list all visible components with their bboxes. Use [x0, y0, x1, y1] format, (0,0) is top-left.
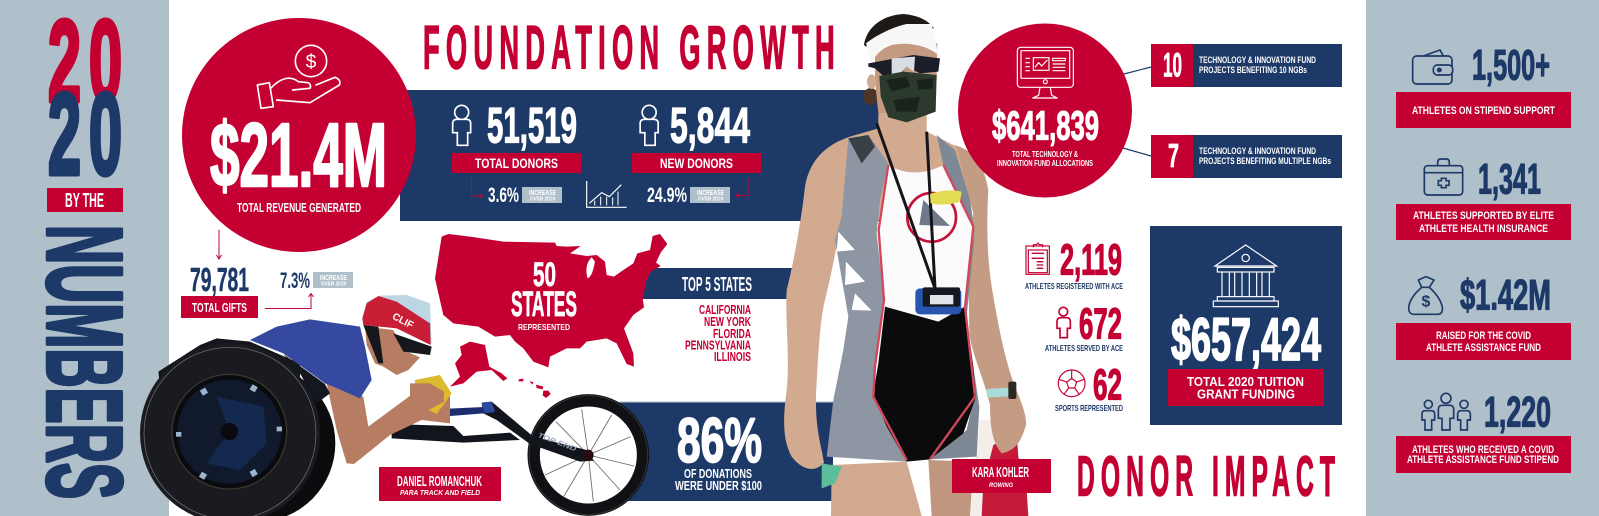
stat box: 7 projects: TECHNOLOGY & INNOVATION FUND	[1199, 146, 1316, 157]
stat: athletes registered with ace: 2,119	[1060, 236, 1122, 284]
arrow: new donors increase	[736, 178, 748, 198]
icon: person	[1057, 307, 1070, 338]
icon: monitor	[1017, 47, 1073, 98]
icon: hand holding coin	[257, 45, 340, 108]
stat: athletes served by ace: 672	[1079, 300, 1122, 348]
icon: three people	[1422, 393, 1470, 430]
infographic canvas: FOUNDATION GROWTH	[423, 14, 841, 82]
panel: total revenue circle	[182, 18, 416, 252]
arrow: donors increase	[472, 178, 482, 198]
icon: wallet	[1413, 50, 1453, 84]
stat: health insurance: 1,341	[1478, 156, 1541, 204]
stat: health insurance	[1396, 156, 1571, 240]
stat: total donors: TOTAL DONORS	[475, 155, 558, 171]
icon: building	[1213, 245, 1278, 307]
big number: technology fund: $641,839	[992, 102, 1099, 148]
stat: gifts increase: OVER 2019	[321, 282, 346, 288]
stat: covid fund raised: RAISED FOR THE COVID	[1436, 330, 1531, 342]
big number: tuition: $657,424	[1171, 306, 1321, 373]
list: top states: CALIFORNIA	[699, 303, 751, 317]
title: by the: BY THE	[65, 190, 104, 212]
arrow: gifts to increase	[265, 294, 314, 308]
label: total revenue generated: TOTAL REVENUE GENERATED	[237, 201, 361, 215]
icon: person	[453, 105, 471, 145]
caption: daniel romanchuk	[379, 467, 501, 501]
map: united states: STATES	[511, 285, 577, 324]
big number: 86%: 86%	[677, 406, 762, 476]
panel: top 5 states band	[640, 268, 810, 299]
stat: sports represented	[1055, 360, 1123, 413]
stat: total donors: 51,519	[487, 98, 577, 154]
stat: sports represented: SPORTS REPRESENTED	[1055, 403, 1123, 413]
stat box: 10 projects	[1151, 44, 1342, 87]
list: top states	[685, 303, 751, 364]
stat: total gifts	[181, 261, 258, 318]
stat: stipend support	[1396, 42, 1571, 128]
caption: daniel romanchuk: DANIEL ROMANCHUK	[397, 473, 482, 490]
title: 20 navy: 0	[89, 69, 122, 199]
label: total 2020 tuition grant funding: TOTAL 2020 TUITION	[1187, 374, 1304, 389]
title: by the	[47, 188, 123, 212]
label: 50 states represented	[511, 256, 577, 332]
label: 50 states represented: REPRESENTED	[518, 322, 570, 332]
stat box: 10 projects: PROJECTS BENEFITING 10 NGBs	[1199, 65, 1307, 76]
label: total 2020 tuition grant funding	[1168, 369, 1324, 406]
stat box: 7 projects: PROJECTS BENEFITING MULTIPLE NGBs	[1199, 156, 1331, 167]
panel: right sidebar	[1366, 0, 1599, 516]
stat: health insurance: ATHLETES SUPPORTED BY ELITE	[1413, 210, 1554, 222]
stat: donors increase: OVER 2019	[530, 196, 555, 202]
arrow: revenue to gifts	[216, 230, 222, 259]
front frame and wheel: TOP END	[537, 432, 577, 453]
stat: athletes served by ace: ATHLETES SERVED BY ACE	[1045, 343, 1123, 353]
label: technology fund allocations: INNOVATION FUND ALLOCATIONS	[997, 158, 1093, 168]
icon: medical kit	[1424, 159, 1463, 195]
stat: covid fund raised	[1396, 272, 1571, 360]
photo: rower in mask	[784, 14, 1028, 516]
icon: money bag	[1409, 277, 1442, 314]
stat: new donors: 5,844	[670, 98, 750, 154]
label: total 2020 tuition grant funding: GRANT FUNDING	[1197, 386, 1295, 402]
rear wheel and body: CLIF	[390, 311, 415, 331]
panel: 86% band	[617, 402, 833, 501]
map: united states	[435, 234, 667, 398]
stat: sports represented: 62	[1093, 360, 1122, 410]
big number: revenue: $21.4M	[210, 106, 387, 206]
icon: hand holding coin: $	[306, 52, 317, 73]
front frame and wheel	[392, 396, 648, 514]
stat: stipend support: ATHLETES ON STIPEND SUPPORT	[1412, 105, 1555, 117]
stat: covid fund raised: ATHLETE ASSISTANCE FUND	[1426, 342, 1541, 354]
icon: money bag: $	[1422, 294, 1431, 311]
stat: new donors increase: OVER 2019	[698, 196, 723, 202]
label: of donations under 100: OF DONATIONS	[684, 466, 752, 481]
stat: donors increase: INCREASE	[529, 188, 556, 197]
panel: tuition grant funding	[1150, 226, 1342, 425]
stat: new donors increase: 24.9%	[647, 184, 687, 207]
stat: health insurance: ATHLETE HEALTH INSURANCE	[1419, 223, 1548, 235]
stat: athletes registered with ace: ATHLETES REGISTERED WITH ACE	[1025, 281, 1123, 291]
list: top states: FLORIDA	[713, 327, 751, 341]
stat box: 7 projects: 7	[1168, 137, 1179, 174]
icon: clipboard	[1026, 243, 1049, 274]
caption: kara kohler: ROWING	[989, 482, 1013, 489]
panel: left sidebar title	[0, 0, 169, 516]
caption: daniel romanchuk: PARA TRACK AND FIELD	[400, 488, 481, 497]
panel: technology fund circle	[958, 24, 1132, 198]
icon: person	[640, 105, 658, 145]
stat: total donors	[452, 98, 581, 173]
panel: foundation growth navy band	[400, 90, 880, 221]
label: 50 states represented: 50	[533, 256, 556, 294]
stat: total gifts: TOTAL GIFTS	[192, 300, 247, 315]
stat: new donors: NEW DONORS	[660, 155, 733, 171]
icon: growth chart	[587, 181, 627, 207]
label: technology fund allocations: TOTAL TECHNOLOGY &	[1012, 149, 1078, 159]
stat box: 10 projects: TECHNOLOGY & INNOVATION FUND	[1199, 55, 1316, 66]
connector lines to technology boxes	[1123, 67, 1151, 156]
stat: gifts increase: INCREASE	[320, 273, 347, 282]
caption: kara kohler	[952, 459, 1051, 493]
stat: gifts increase: 7.3%	[280, 268, 310, 293]
stat: covid stipend recipients	[1396, 388, 1571, 473]
stat box: 10 projects: 10	[1163, 46, 1182, 84]
icon: soccer ball	[1058, 370, 1085, 397]
caption: kara kohler: KARA KOHLER	[972, 464, 1029, 481]
photo: wheelchair racer	[140, 295, 648, 516]
label: of donations under 100	[675, 466, 762, 493]
stat: new donors increase: INCREASE	[697, 188, 724, 197]
stat box: 7 projects	[1151, 135, 1342, 178]
stat: athletes served by ace	[1045, 300, 1123, 353]
stat: total gifts: 79,781	[190, 261, 249, 298]
stat: covid stipend recipients: 1,220	[1484, 388, 1551, 436]
rear wheel and body	[140, 295, 450, 516]
label: technology fund allocations	[997, 149, 1093, 168]
stat: donors increase	[488, 184, 562, 207]
stat: athletes registered with ace	[1025, 236, 1123, 291]
stat: donors increase: 3.6%	[488, 184, 519, 207]
label: of donations under 100: WERE UNDER $100	[675, 478, 762, 493]
list: top states: ILLINOIS	[714, 350, 751, 364]
label: top 5 states: TOP 5 STATES	[682, 274, 752, 296]
list: top states: NEW YORK	[704, 315, 751, 329]
hand and glove	[410, 375, 452, 414]
list: top states: PENNSYLVANIA	[685, 338, 751, 352]
stat: new donors	[632, 98, 761, 173]
title: 20 navy: 2	[48, 69, 81, 199]
stat: gifts increase	[280, 268, 353, 293]
